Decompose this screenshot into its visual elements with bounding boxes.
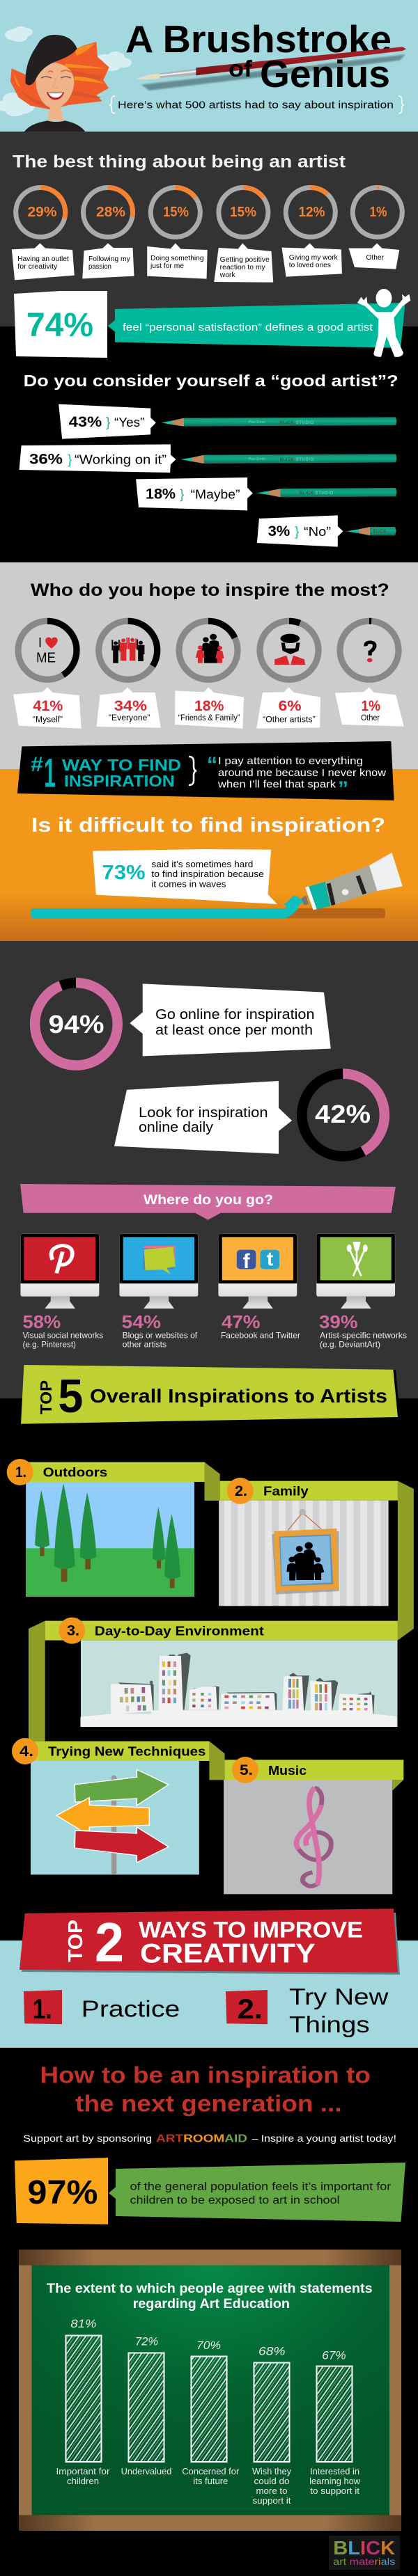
- illustration: woman artist with beret: [10, 35, 109, 132]
- subtitle with braces: [109, 96, 404, 113]
- label: 41% myself: [13, 687, 82, 729]
- illustration: paint brush: BLICK MASTER PASTEL: [288, 63, 318, 69]
- stat: 58% visual social networks: (e.g. Pinterest): [22, 1340, 76, 1350]
- item: 2 try new things: 2.: [238, 1994, 263, 2025]
- donut: 15%: 15%: [163, 205, 189, 220]
- label: giving my work: to loved ones: [289, 262, 331, 269]
- label: 1% other: [335, 687, 404, 727]
- banner: where do you go: Where do you go?: [144, 1193, 273, 1208]
- donut: 42%: 42%: [315, 1100, 371, 1128]
- donut: everyone 34% with crowd icon: [99, 621, 157, 679]
- bar: 67% interested in learning: Interested in: [310, 2466, 359, 2476]
- item: 1 practice: [24, 1990, 180, 2025]
- banner: number one way to find inspiration: #: [31, 753, 43, 776]
- chart title: regarding Art Education: [133, 2297, 290, 2312]
- stat: 47% facebook and twitter: Facebook and Twitter: [221, 1331, 300, 1341]
- panel: family: Family: [263, 1485, 309, 1499]
- donut: 29%: [16, 188, 65, 237]
- donut: 1%: 1%: [369, 205, 387, 220]
- row: 43% yes: “Yes”: [114, 416, 144, 429]
- icon: cheering white figure: [357, 289, 410, 357]
- title: A Brushstroke: A Brushstroke: [125, 17, 392, 61]
- label: other: [349, 243, 399, 269]
- bar: 68% wish they could do more: [252, 2344, 291, 2506]
- bar: 72% undervalued: [121, 2334, 171, 2476]
- row: 18% maybe: [136, 477, 253, 510]
- bar: 70% concerned for its future: [182, 2339, 240, 2486]
- row: 43% yes: }: [106, 416, 110, 430]
- pencil brand: 18%: BLICK STUDIO: [300, 491, 334, 496]
- ribbon connector folds: [29, 1462, 414, 1741]
- panel: outdoors: Outdoors: [43, 1466, 107, 1480]
- bar: 81% important for children: [56, 2317, 110, 2486]
- callout: look online daily: online daily: [139, 1120, 213, 1135]
- row: 3% no: [257, 515, 343, 547]
- illustration: paint brush: [136, 47, 406, 90]
- label: following my passion: [82, 243, 134, 278]
- title: Genius: Genius: [260, 52, 390, 95]
- label: following my passion: passion: [88, 263, 111, 271]
- banner: number one way to find inspiration: 1: [44, 751, 56, 796]
- pencil brand: 36%: BLICK STUDIO: [280, 458, 314, 462]
- bar: 81% important for children: Important for: [56, 2466, 110, 2476]
- panel: family: 2.: [235, 1483, 247, 1499]
- banner: top 5 overall inspirations: 5: [58, 1370, 83, 1423]
- pencil: 36%: [180, 454, 396, 464]
- chalkboard frame: [19, 2250, 401, 2531]
- label: having an outlet: for creativity: [17, 263, 57, 271]
- row: 3% no: 3%: [268, 523, 291, 539]
- panel: trying new techniques: [12, 1738, 225, 1874]
- donut: other 1% with question mark: [340, 621, 398, 679]
- section background: black good artist: [0, 326, 418, 562]
- label: 34% everyone: [97, 687, 161, 728]
- row: 36% working on it: }: [68, 453, 72, 468]
- callout: 73% hard to find inspiration: it comes in waves: [151, 878, 226, 889]
- bar: 81% important for children: children: [67, 2476, 99, 2486]
- row: 36% working on it: “Working on it”: [75, 453, 167, 467]
- callout: 73% hard to find inspiration: [93, 849, 277, 904]
- heading: who do you hope: Who do you hope to inspire the most?: [31, 580, 389, 600]
- label: doing something: just for me: [150, 262, 184, 270]
- panel: outdoors: [7, 1459, 204, 1597]
- pencil label: 36%: Pea Green: [249, 457, 265, 461]
- donut: 15% second: 15%: [230, 205, 256, 220]
- row: 18% maybe: “Maybe”: [191, 488, 240, 502]
- heading: the best thing: The best thing about being an artist: [13, 152, 346, 172]
- label: 18% friends and family: “Friends & Family”: [178, 714, 240, 722]
- heading: is it difficult: Is it difficult to find inspiration?: [31, 814, 385, 837]
- donut: 28%: [84, 188, 132, 237]
- bar: 68% wish they could do more: support it: [252, 2495, 291, 2506]
- callout: 73% hard to find inspiration: to find inspiration because: [151, 869, 264, 879]
- stat: 54% blogs: Blogs or websites of: [123, 1331, 198, 1341]
- label: having an outlet: Having an outlet: [17, 255, 69, 263]
- panel: music: Music: [268, 1764, 307, 1778]
- panel: trying new techniques: Trying New Techniques: [48, 1745, 206, 1759]
- heading: how to be an inspiration: the next generation ...: [75, 2090, 342, 2116]
- pencil label: 43%: Pea Green: [249, 420, 265, 425]
- stat: 58% visual social networks: 58%: [22, 1311, 61, 1332]
- pencil brand: 3%: BLICK: [373, 530, 386, 534]
- label: getting positive: Getting positive: [220, 256, 270, 264]
- bar: 70% concerned for its future: its future: [193, 2476, 228, 2486]
- bar: 68% wish they could do more: 68%: [258, 2344, 286, 2357]
- panel: family: [219, 1478, 398, 1606]
- bar: 72% undervalued: 72%: [135, 2334, 158, 2348]
- banner: number one way to find inspiration: when I’ll feel that spark: [217, 779, 336, 791]
- row: 18% maybe: 18%: [146, 487, 176, 503]
- label: 18% friends and family: 18%: [194, 698, 224, 714]
- heading: how to be an inspiration: [40, 2062, 371, 2116]
- donut: 42%: [302, 1074, 385, 1156]
- text: support art by sponsoring Artroom Aid: ART ROOM AID: [156, 2133, 247, 2145]
- stat: 39% artist networks: [319, 1311, 407, 1350]
- bar: 67% interested in learning: learning how: [309, 2476, 361, 2486]
- row: 36% working on it: 36%: [29, 452, 63, 468]
- donut: 1%: [353, 188, 402, 237]
- panel: chalkboard chart: [19, 2250, 401, 2531]
- callout: go online monthly: at least once per month: [155, 1023, 313, 1038]
- label: 18% friends and family: [175, 687, 244, 729]
- bar: 70% concerned for its future: 70%: [196, 2339, 221, 2352]
- bar: 67% interested in learning: 67%: [322, 2348, 346, 2362]
- stat: 39% artist networks: Artist-specific networks: [320, 1331, 407, 1341]
- label: getting positive: [214, 243, 273, 283]
- logo: Blick art materials: [329, 2536, 400, 2570]
- bar: paint strip 73%: [31, 896, 385, 918]
- callout: 97% general population: [15, 2158, 405, 2225]
- donut: myself 41% with I heart me: I: [38, 635, 42, 651]
- pencil: 43%: [162, 417, 396, 427]
- bar: 72% undervalued: Undervalued: [121, 2466, 171, 2476]
- stat: 54% blogs: other artists: [123, 1340, 167, 1350]
- monitor: artist networks: [316, 1234, 395, 1309]
- row: 18% maybe: }: [180, 488, 184, 503]
- monitor: Facebook and Twitter: t: [267, 1248, 273, 1270]
- label: 1% other: 1%: [361, 698, 380, 714]
- callout: look online daily: Look for inspiration: [139, 1105, 268, 1121]
- donut: 28%: 28%: [96, 205, 125, 220]
- banner: number one way to find inspiration: I pay attention to everything: [218, 755, 363, 767]
- monitor: Facebook and Twitter: f: [243, 1250, 251, 1273]
- item: 1 practice: 1.: [33, 1994, 52, 2025]
- callout: 74% personal satisfaction: [14, 291, 405, 358]
- donut: 15%: [150, 188, 200, 237]
- stat: 58% visual social networks: [22, 1311, 103, 1350]
- banner: number one way to find inspiration: “: [207, 753, 217, 776]
- chart title: [47, 2282, 373, 2312]
- label: giving my work: Giving my work: [289, 254, 339, 262]
- clouds: [0, 26, 132, 116]
- bar: 81% important for children: 81%: [70, 2317, 96, 2330]
- label: giving my work: [281, 243, 342, 277]
- banner: number one way to find inspiration: ”: [338, 777, 348, 800]
- label: getting positive: reaction to my: [220, 264, 265, 271]
- subtitle with braces: Here’s what 500 artists had to say about inspiration: [118, 100, 394, 111]
- label: having an outlet: [12, 243, 75, 280]
- label: 1% other: Other: [361, 714, 380, 722]
- row: 43% yes: 43%: [69, 414, 102, 430]
- item: 2 try new things: Things: [289, 2012, 370, 2037]
- bar: 68% wish they could do more: more to: [256, 2486, 287, 2496]
- section background: grey inspire: [0, 562, 418, 769]
- row: 36% working on it: [20, 444, 176, 473]
- illustration: city skyline: [80, 1653, 396, 1727]
- monitor: blogs: [119, 1234, 198, 1309]
- stat: 58% visual social networks: Visual social networks: [22, 1331, 103, 1341]
- banner: number one way to find inspiration: WAY TO FIND: [62, 756, 181, 774]
- bar: 68% wish they could do more: Wish they: [252, 2466, 291, 2476]
- illustration: paint tube: [301, 853, 403, 910]
- donut: 94%: 94%: [49, 1010, 104, 1038]
- section background: sky header: [0, 0, 418, 132]
- panel: day-to-day environment: Day-to-Day Environment: [95, 1624, 264, 1638]
- callout: look online daily: [114, 1081, 292, 1154]
- monitor: Facebook and Twitter: [218, 1234, 297, 1309]
- panel: day-to-day environment: 3.: [67, 1623, 79, 1638]
- bar: 67% interested in learning: [309, 2348, 361, 2496]
- label: doing something: [147, 243, 208, 279]
- label: 6% other artists: [256, 687, 320, 729]
- label: getting positive: work: [219, 271, 236, 279]
- section background: dark online: [0, 941, 418, 1398]
- panel: music: 5.: [240, 1762, 253, 1778]
- stat: 47% facebook and twitter: [221, 1311, 300, 1341]
- label: 6% other artists: 6%: [279, 698, 302, 714]
- row: 43% yes: [59, 404, 156, 439]
- chart title: The extent to which people agree with statements: [47, 2282, 373, 2296]
- stat: 39% artist networks: (e.g. DeviantArt): [320, 1340, 380, 1350]
- label: 41% myself: 41%: [33, 698, 63, 714]
- logo: Blick art materials: art mate rials: [333, 2556, 395, 2567]
- section background: black top five: [0, 1398, 418, 1941]
- donut: 12%: [286, 188, 335, 237]
- banner: top 2 ways to improve creativity: CREATIVITY: [140, 1938, 316, 1968]
- label: 34% everyone: “Everyone”: [109, 714, 150, 722]
- bar: 68% wish they could do more: could do: [254, 2476, 290, 2486]
- pencil brand: 43%: BLICK STUDIO: [280, 421, 314, 425]
- donut: friends and family 18% with family icon: [179, 621, 238, 679]
- label: 34% everyone: 34%: [114, 698, 147, 714]
- banner: top 2 ways to improve creativity: [20, 1909, 400, 1975]
- label: doing something: Doing something: [150, 255, 203, 262]
- stat: 47% facebook and twitter: 47%: [222, 1311, 261, 1332]
- donut: 29%: 29%: [28, 205, 57, 220]
- callout: 97% general population: children to be exposed to art in school: [130, 2195, 339, 2206]
- donut: myself 41% with I heart me: [18, 621, 77, 679]
- banner: top 2 ways to improve creativity: WAYS TO IMPROVE: [139, 1917, 363, 1942]
- banner: number one way to find inspiration: INSPIRATION: [64, 772, 175, 790]
- callout: 97% general population: 97%: [27, 2174, 98, 2211]
- pencil: 18%: [256, 488, 396, 497]
- stat: 54% blogs: [121, 1311, 198, 1350]
- section background: dark best thing: [0, 132, 418, 327]
- donut: 15% second: [219, 188, 268, 237]
- section background: sky top two: [0, 1941, 418, 2048]
- banner: where do you go: [20, 1184, 396, 1220]
- label: 6% other artists: “Other artists”: [263, 716, 316, 725]
- bar: 70% concerned for its future: Concerned for: [182, 2466, 240, 2476]
- item: 2 try new things: Try New: [289, 1984, 389, 2009]
- label: other: Other: [366, 254, 385, 262]
- stat: 39% artist networks: 39%: [319, 1311, 358, 1332]
- pencil: 3%: [346, 527, 396, 535]
- text: support art by sponsoring Artroom Aid: [23, 2133, 396, 2145]
- callout: 97% general population: of the general population feels it’s important for: [130, 2181, 392, 2193]
- row: 3% no: “No”: [304, 525, 331, 539]
- callout: go online monthly: Go online for inspiration: [155, 1007, 315, 1022]
- heading: good artist: Do you consider yourself a “good artist”?: [24, 372, 398, 390]
- donut: other artists 6% with artist icon: [260, 621, 318, 679]
- banner: number one way to find inspiration: around me because I never know: [218, 767, 386, 779]
- text: support art by sponsoring Artroom Aid: – Inspire a young artist today!: [252, 2133, 396, 2144]
- panel: day-to-day environment: [45, 1618, 398, 1727]
- section background: black next generation: [0, 2048, 418, 2576]
- banner: top 2 ways to improve creativity: TOP: [65, 1920, 87, 1962]
- callout: 74% personal satisfaction: feel “personal satisfaction” defines a good artist: [123, 322, 373, 333]
- panel: outdoors: 1.: [15, 1464, 26, 1480]
- banner: top 2 ways to improve creativity: 2: [95, 1911, 124, 1973]
- item: 1 practice: Practice: [82, 1996, 180, 2021]
- donut: 12%: 12%: [298, 205, 325, 220]
- monitor: Pinterest: [20, 1234, 99, 1309]
- banner: top 5 overall inspirations: TOP: [37, 1380, 55, 1414]
- banner: top 5 overall inspirations: Overall Inspirations to Artists: [90, 1385, 387, 1407]
- label: following my passion: Following my: [88, 255, 130, 263]
- banner: number one way to find inspiration: [17, 741, 394, 800]
- bar: 67% interested in learning: to support it: [310, 2486, 359, 2496]
- section background: orange difficulty: [0, 769, 418, 941]
- label: 41% myself: “Myself”: [33, 716, 63, 725]
- donut: 94%: [35, 983, 118, 1066]
- callout: go online monthly: [130, 983, 331, 1056]
- logo: Blick art materials: BLICK: [333, 2537, 395, 2559]
- callout: 73% hard to find inspiration: 73%: [102, 862, 146, 884]
- stat: 54% blogs: 54%: [121, 1311, 161, 1332]
- item: 2 try new things: [226, 1984, 389, 2037]
- text: support art by sponsoring Artroom Aid: Support art by sponsoring: [23, 2133, 152, 2144]
- donut: myself 41% with I heart me: ME: [36, 651, 56, 666]
- heading: how to be an inspiration: How to be an inspiration to: [40, 2062, 371, 2088]
- callout: 73% hard to find inspiration: said it’s sometimes hard: [151, 859, 253, 869]
- callout: 74% personal satisfaction: 74%: [26, 307, 93, 344]
- panel: trying new techniques: 4.: [20, 1744, 33, 1760]
- panel: music: [224, 1757, 403, 1894]
- title: of: of: [229, 56, 253, 81]
- row: 3% no: }: [295, 525, 299, 539]
- banner: top 5 overall inspirations: [21, 1365, 400, 1425]
